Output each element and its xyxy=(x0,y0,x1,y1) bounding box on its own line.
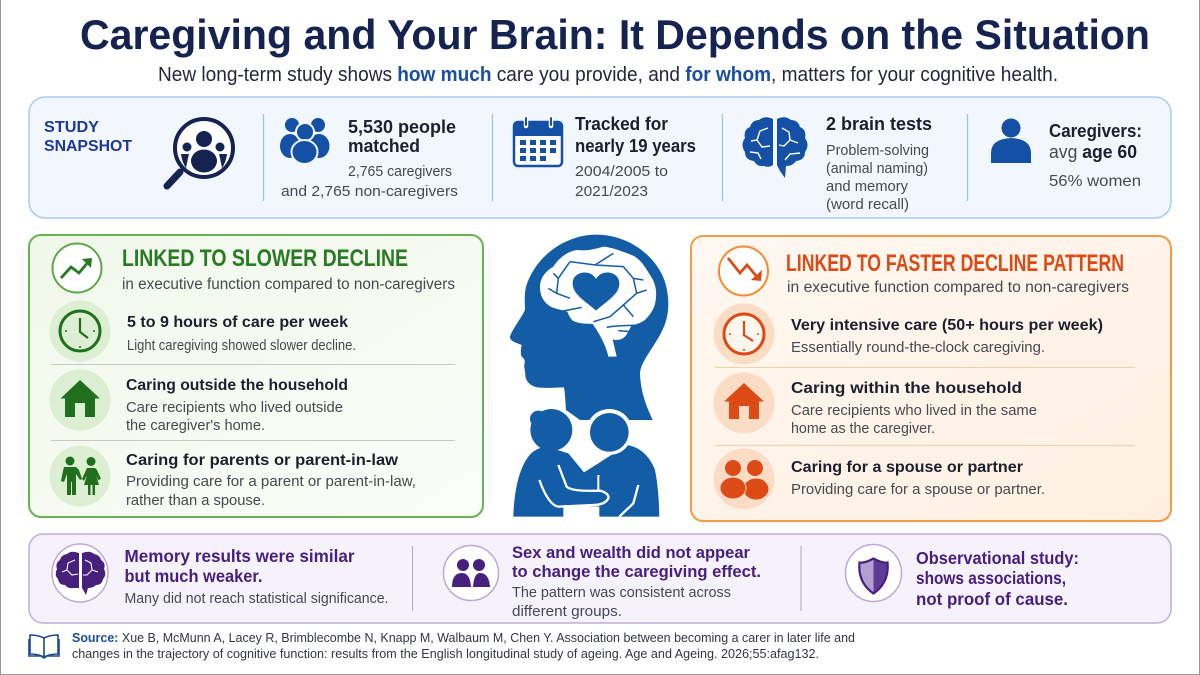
item: very intensive care: Very intensive care (50+ hours per week) xyxy=(791,317,1103,334)
icon: orange pair xyxy=(714,448,774,510)
finding: sex and wealth: The pattern was consistent across xyxy=(512,585,731,601)
heading: study snapshot: STUDY xyxy=(44,119,99,136)
stat: people matched: 2,765 caregivers xyxy=(348,163,452,180)
icon: shield xyxy=(846,544,902,602)
stat: people matched: 5,530 people xyxy=(348,117,456,137)
stat: caregivers: 56% women xyxy=(1049,173,1141,190)
item: very intensive care: Essentially round-the-clock caregiving. xyxy=(791,340,1045,356)
finding: observational: shows associations, xyxy=(916,568,1066,588)
panel: linked to faster decline xyxy=(691,236,1171,521)
finding: memory xyxy=(124,546,388,607)
item: spouse: Providing care for a spouse or partner. xyxy=(791,482,1045,498)
item: within household: Care recipients who lived in the same xyxy=(791,403,1037,419)
item: outside household: Caring outside the household xyxy=(126,377,348,394)
icon: purple brain xyxy=(52,544,108,602)
stat: people matched xyxy=(281,117,458,200)
finding: sex and wealth: different groups. xyxy=(512,604,622,620)
heading: study snapshot: SNAPSHOT xyxy=(44,138,132,155)
stat: tracked years: nearly 19 years xyxy=(575,136,696,156)
finding: sex and wealth: to change the caregiving effect. xyxy=(512,562,761,581)
finding: observational: Observational study: xyxy=(916,548,1079,568)
item: within household: home as the caregiver. xyxy=(791,421,935,437)
item: parents: rather than a spouse. xyxy=(126,493,265,509)
icon: magnifier with people xyxy=(167,119,233,186)
icon: purple people xyxy=(444,546,498,600)
title: Caregiving and Your Brain: It Depends on the Situation xyxy=(80,11,1150,58)
icon: green clock xyxy=(50,300,110,362)
icon: trend down xyxy=(719,246,768,296)
icon: people group xyxy=(280,118,330,164)
icon: calendar xyxy=(513,118,563,166)
brain xyxy=(540,247,656,357)
stat: brain tests: 2 brain tests xyxy=(826,114,932,134)
finding: sex and wealth: Sex and wealth did not appear xyxy=(512,543,750,562)
source citation xyxy=(72,631,855,661)
stat: caregivers: avg age 60 xyxy=(1049,142,1137,162)
item: spouse xyxy=(791,459,1045,498)
finding: observational xyxy=(916,548,1079,609)
stat: brain tests xyxy=(826,114,932,213)
stat: tracked years: Tracked for xyxy=(575,114,668,134)
heading: slower: LINKED TO SLOWER DECLINE xyxy=(122,245,408,272)
illustration: head, brain with heart and caregivers xyxy=(510,235,668,517)
item: parents: Providing care for a parent or parent-in-law, xyxy=(126,474,416,490)
icon: trend up xyxy=(52,244,102,292)
item: within household xyxy=(791,380,1037,437)
finding: memory: but much weaker. xyxy=(124,566,262,586)
panel: study snapshot xyxy=(29,97,1171,218)
subheading: faster: in executive function compared to non-caregivers xyxy=(787,279,1129,296)
stat: people matched: and 2,765 non-caregivers xyxy=(281,183,458,200)
source citation: Source: Xue B, McMunn A, Lacey R, Brimblecombe N, Knapp M, Walbaum M, Chen Y. Association between becoming a carer in later life and xyxy=(72,631,855,645)
icon: orange house xyxy=(714,372,774,434)
stat: caregivers xyxy=(1049,121,1142,190)
stat: tracked years: 2021/2023 xyxy=(575,183,648,200)
source citation: changes in the trajectory of cognitive function: results from the English longitudinal study of ageing. Age and Ageing. 2026;55:afag132. xyxy=(72,647,819,661)
subtitle: New long-term study shows how much care you provide, and for whom, matters for your cognitive health. xyxy=(158,64,1058,86)
finding: observational: not proof of cause. xyxy=(916,589,1068,609)
item: 5 to 9 hours xyxy=(127,314,356,354)
finding: memory: Many did not reach statistical significance. xyxy=(124,591,388,607)
finding: memory: Memory results were similar xyxy=(124,546,355,566)
panel: additional findings xyxy=(29,534,1171,623)
item: within household: Caring within the household xyxy=(791,380,1022,397)
item: outside household xyxy=(126,377,348,434)
item: parents: Caring for parents or parent-in-law xyxy=(126,452,399,469)
item: 5 to 9 hours: Light caregiving showed slower decline. xyxy=(127,338,356,354)
finding: sex and wealth xyxy=(512,543,761,620)
stat: brain tests: Problem-solving xyxy=(826,143,929,159)
stat: caregivers: Caregivers: xyxy=(1049,121,1142,141)
item: spouse: Caring for a spouse or partner xyxy=(791,459,1023,476)
heart xyxy=(573,273,619,311)
stat: brain tests: (animal naming) xyxy=(826,161,928,177)
panel: linked to slower decline xyxy=(29,235,483,517)
stat: tracked years xyxy=(575,114,696,200)
icon: green house xyxy=(50,370,110,430)
icon: book xyxy=(29,635,59,658)
heading: study snapshot xyxy=(44,119,132,155)
item: very intensive care xyxy=(791,317,1103,356)
subheading: slower: in executive function compared to non-caregivers xyxy=(122,276,455,293)
head silhouette xyxy=(510,235,668,420)
item: outside household: the caregiver's home. xyxy=(126,418,265,434)
item: outside household: Care recipients who lived outside xyxy=(126,400,343,416)
icon: brain xyxy=(742,117,808,178)
stat: tracked years: 2004/2005 to xyxy=(575,163,668,180)
stat: people matched: matched xyxy=(348,136,420,156)
stat: brain tests: and memory xyxy=(826,179,909,195)
item: 5 to 9 hours: 5 to 9 hours of care per week xyxy=(127,314,348,331)
icon: green couple xyxy=(50,446,110,506)
item: parents xyxy=(126,452,416,509)
stat: brain tests: (word recall) xyxy=(826,197,909,213)
caregiver figures xyxy=(527,406,575,454)
icon: person xyxy=(991,118,1031,163)
icon: orange clock xyxy=(714,304,774,364)
